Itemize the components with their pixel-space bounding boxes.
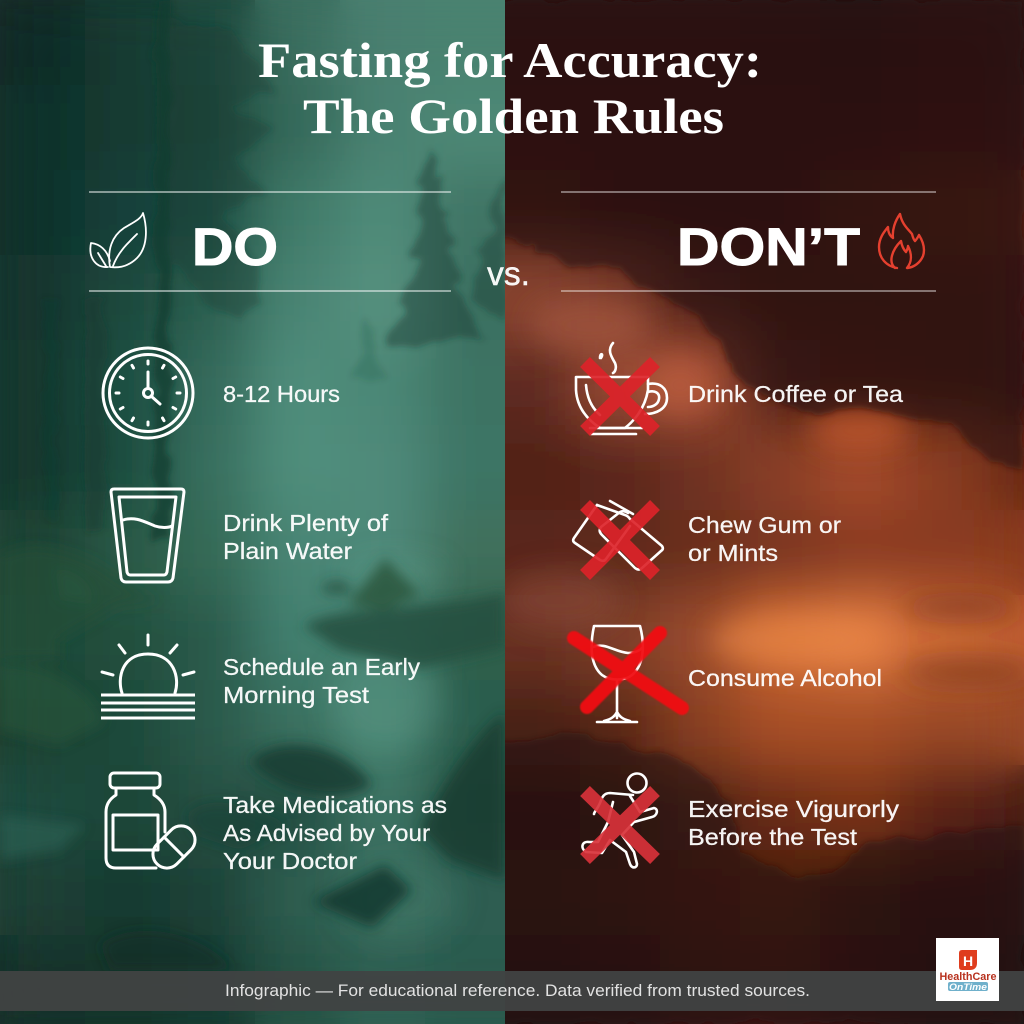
item: exercise — [582, 774, 899, 867]
panel: forest background — [0, 0, 505, 1024]
label: water: Plain Water — [223, 538, 352, 564]
item: morning test — [101, 635, 420, 718]
icon: sunrise — [101, 635, 195, 718]
label: exercise: Before the Test — [688, 824, 858, 850]
title: The Golden Rules — [303, 88, 724, 144]
item: medications — [106, 773, 447, 874]
label: coffee: Drink Coffee or Tea — [688, 381, 904, 407]
footer note: Infographic — For educational reference. Data verified from trusted sources. — [225, 982, 810, 1000]
label: gum: Chew Gum or — [688, 512, 841, 538]
logo: HealthCare OnTime: HealthCare — [940, 971, 996, 983]
heading: don't: DON’T — [677, 218, 860, 277]
panel: don't list — [573, 343, 904, 867]
label: exercise: Exercise Vigurorly — [688, 796, 899, 822]
icon: glass of water — [111, 489, 184, 582]
icon: clock — [103, 348, 193, 438]
panel: do list — [101, 348, 447, 874]
icon: crossed wine glass — [574, 626, 682, 722]
title: Fasting for Accuracy: — [258, 32, 762, 88]
icon: crossed gum and mints — [573, 501, 663, 575]
item: coffee — [576, 343, 904, 434]
title — [258, 32, 762, 144]
icon: crossed runner — [582, 774, 657, 867]
logo: HealthCare OnTime: H — [963, 953, 973, 969]
vs label: vs. — [487, 255, 530, 292]
icon: crossed coffee cup — [576, 343, 667, 434]
label: gum: or Mints — [688, 540, 778, 566]
label: medications: Take Medications as — [223, 792, 447, 818]
item: alcohol — [574, 626, 882, 722]
label: morning test: Schedule an Early — [223, 654, 420, 680]
item: gum — [573, 501, 841, 575]
item: fasting hours — [103, 348, 340, 438]
panel: don't header — [561, 192, 936, 291]
icon: leaf — [90, 213, 146, 267]
heading: do: DO — [192, 218, 278, 277]
panel: do header — [89, 192, 451, 291]
footer bar — [0, 971, 1024, 1011]
icon: pill bottle and capsule — [106, 773, 201, 874]
panel: storm background — [505, 0, 1024, 1024]
icon: flame — [879, 214, 924, 268]
label: medications: Your Doctor — [223, 848, 357, 874]
label: hours: 8-12 Hours — [223, 381, 340, 407]
label: alcohol: Consume Alcohol — [688, 665, 882, 691]
item: water — [111, 489, 389, 582]
label: water: Drink Plenty of — [223, 510, 389, 536]
label: medications: As Advised by Your — [223, 820, 430, 846]
label: morning test: Morning Test — [223, 682, 370, 708]
logo: HealthCare OnTime: OnTime — [949, 982, 988, 993]
logo: HealthCare OnTime — [936, 938, 999, 1001]
